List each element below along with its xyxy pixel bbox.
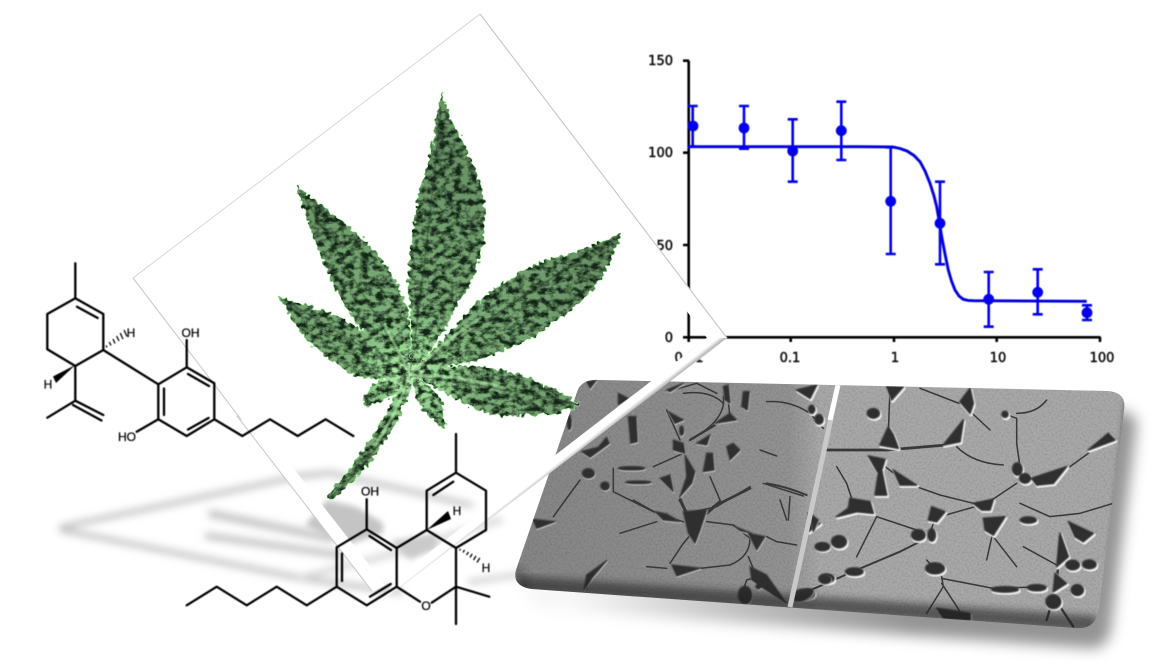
chart axis labels: 10 (990, 351, 1006, 366)
neuron network right half (760, 385, 1115, 627)
chart axis labels: 50 (656, 239, 673, 254)
chart axis labels: 150 (648, 54, 673, 69)
labels: OH (182, 326, 200, 340)
chart axes (683, 61, 1100, 342)
labels: H (453, 504, 461, 518)
labels (361, 484, 490, 613)
molecule: tetrahydrocannabinol (187, 434, 490, 624)
labels: H (44, 378, 52, 392)
cast shadow of leaf and sheet (62, 416, 525, 592)
chart axis labels: 0.1 (780, 351, 800, 366)
labels: H (482, 561, 490, 575)
white band where the sheet crosses the panel (381, 338, 727, 602)
leaf stem (327, 376, 413, 499)
panel grain (516, 380, 1124, 621)
leaflet: lower left (279, 297, 412, 379)
data points with error bars (688, 102, 1092, 327)
leaflet: small left (362, 374, 412, 406)
panel bottom shading (510, 576, 1100, 634)
chart axis labels: 0 (665, 331, 673, 346)
labels: HO (118, 430, 136, 444)
hashed wedge (460, 549, 480, 562)
solid wedge (427, 511, 451, 530)
neuron network lower left (533, 500, 831, 604)
chart axis labels: 100 (648, 146, 673, 161)
shadow blob (305, 500, 383, 545)
divider between images (790, 385, 838, 607)
neuron network upper left (553, 381, 750, 517)
leaflet: right (410, 233, 622, 374)
transparent sheet frame (133, 14, 727, 591)
labels: O (421, 599, 431, 613)
leaflet: small right (410, 374, 445, 428)
chart axis labels: 100 (1090, 351, 1114, 366)
panel lower left edge shading (515, 564, 528, 588)
panel background (515, 380, 1124, 628)
fitted curve (690, 147, 1087, 301)
labels: H (127, 326, 135, 340)
microscopy panel shadow (527, 400, 1136, 648)
microscopy panel of neurons (515, 380, 1124, 628)
leaf veins (285, 110, 615, 496)
white sheet edge strip (240, 418, 385, 592)
labels: OH (361, 484, 379, 498)
solid wedge (53, 365, 75, 383)
chart axis labels: 1 (891, 351, 899, 366)
leaflet: top (408, 93, 484, 374)
dose-response chart (648, 54, 1114, 366)
labels (44, 326, 200, 444)
hashed wedge (106, 330, 127, 348)
chart axis labels: 0.01 (675, 351, 703, 366)
cannabis leaf (279, 93, 622, 499)
panel right shading (1108, 398, 1124, 537)
leaflet: lower right (410, 366, 581, 416)
leaflet: upper left (296, 186, 412, 372)
chart axis labels (648, 54, 1114, 366)
molecule: cannabidiol (44, 263, 353, 444)
